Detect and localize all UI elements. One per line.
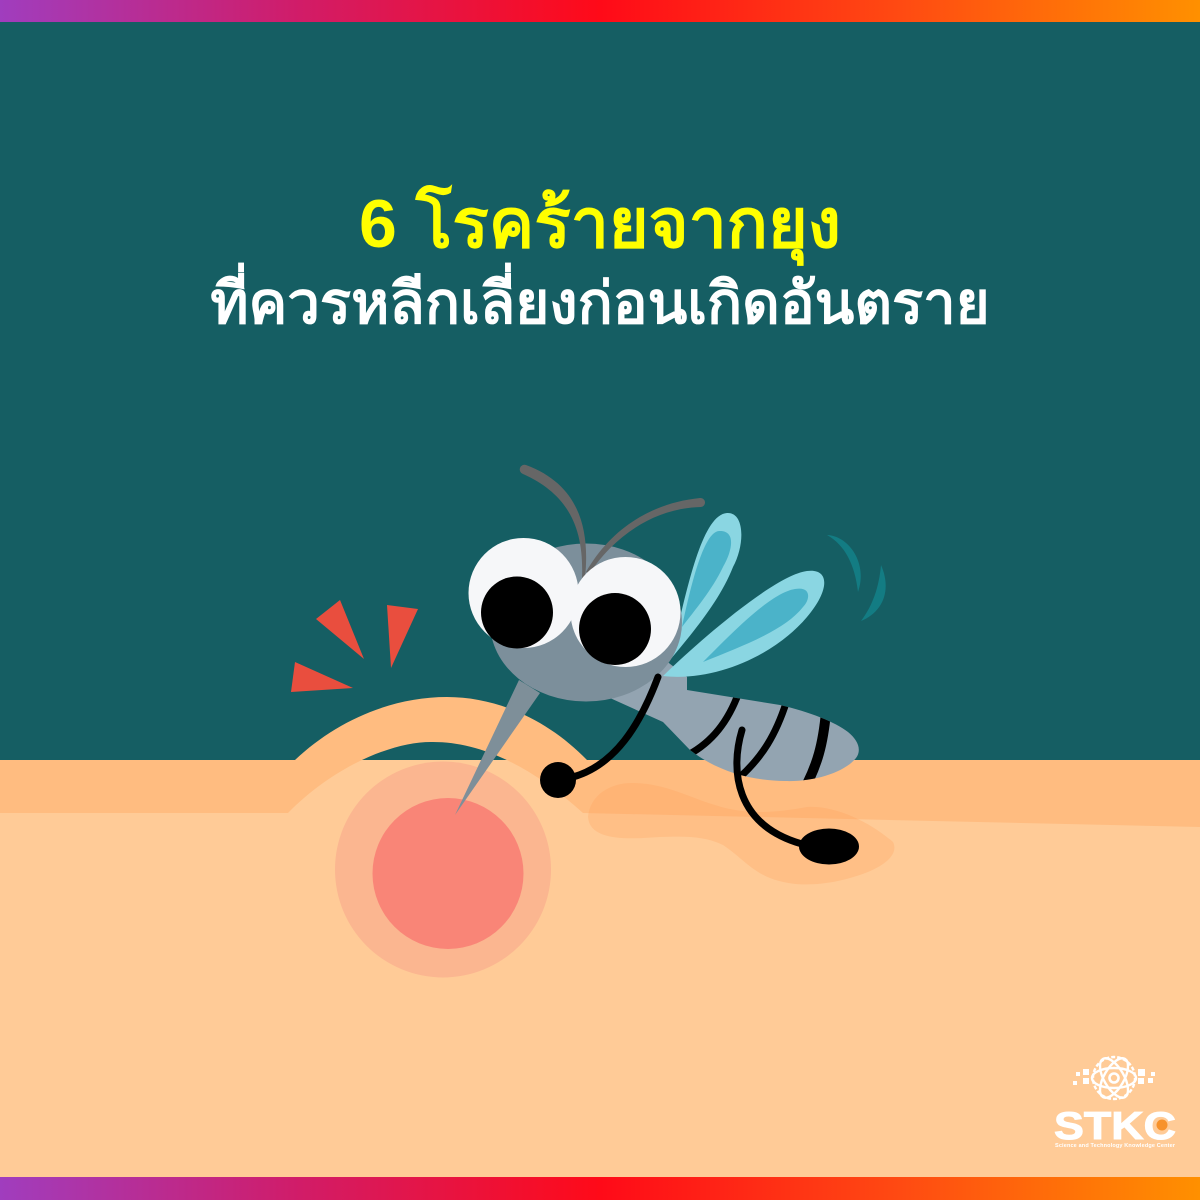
abdomen stripes	[690, 698, 830, 780]
logo atom icon	[1092, 1054, 1136, 1102]
swelling outer ring	[335, 762, 551, 978]
head	[490, 544, 682, 702]
back wing	[670, 513, 741, 660]
front wing	[663, 571, 824, 677]
top gradient bar	[0, 0, 1200, 22]
red pain marks	[291, 600, 418, 692]
raised skin band with bump	[0, 697, 1200, 827]
mosquito shadow on skin	[588, 783, 894, 884]
logo tagline: Science and Technology Knowledge Center	[1055, 1143, 1176, 1149]
bottom gradient bar	[0, 1177, 1200, 1200]
left eye	[468, 538, 578, 648]
antennae	[520, 465, 705, 578]
thorax and abdomen	[610, 660, 859, 781]
logo: STKC	[1054, 1054, 1176, 1149]
logo wordmark: STKC	[1054, 1105, 1176, 1148]
skin base	[0, 760, 1200, 1177]
red bite centre	[372, 798, 524, 949]
right eye	[570, 557, 680, 667]
title line 1: 6 โรคร้ายจากยุง	[359, 184, 841, 266]
logo orange dot	[1156, 1120, 1168, 1130]
logo pixel squares	[1073, 1069, 1155, 1085]
front leg	[540, 677, 658, 798]
back leg	[737, 730, 859, 864]
bite mark	[335, 762, 551, 978]
title	[210, 184, 990, 336]
skin	[0, 697, 1200, 1177]
icon: mosquito	[455, 465, 859, 864]
proboscis	[455, 680, 540, 815]
title line 2: ที่ควรหลีกเลี่ยงก่อนเกิดอันตราย	[210, 262, 990, 336]
wing motion marks	[827, 535, 886, 621]
